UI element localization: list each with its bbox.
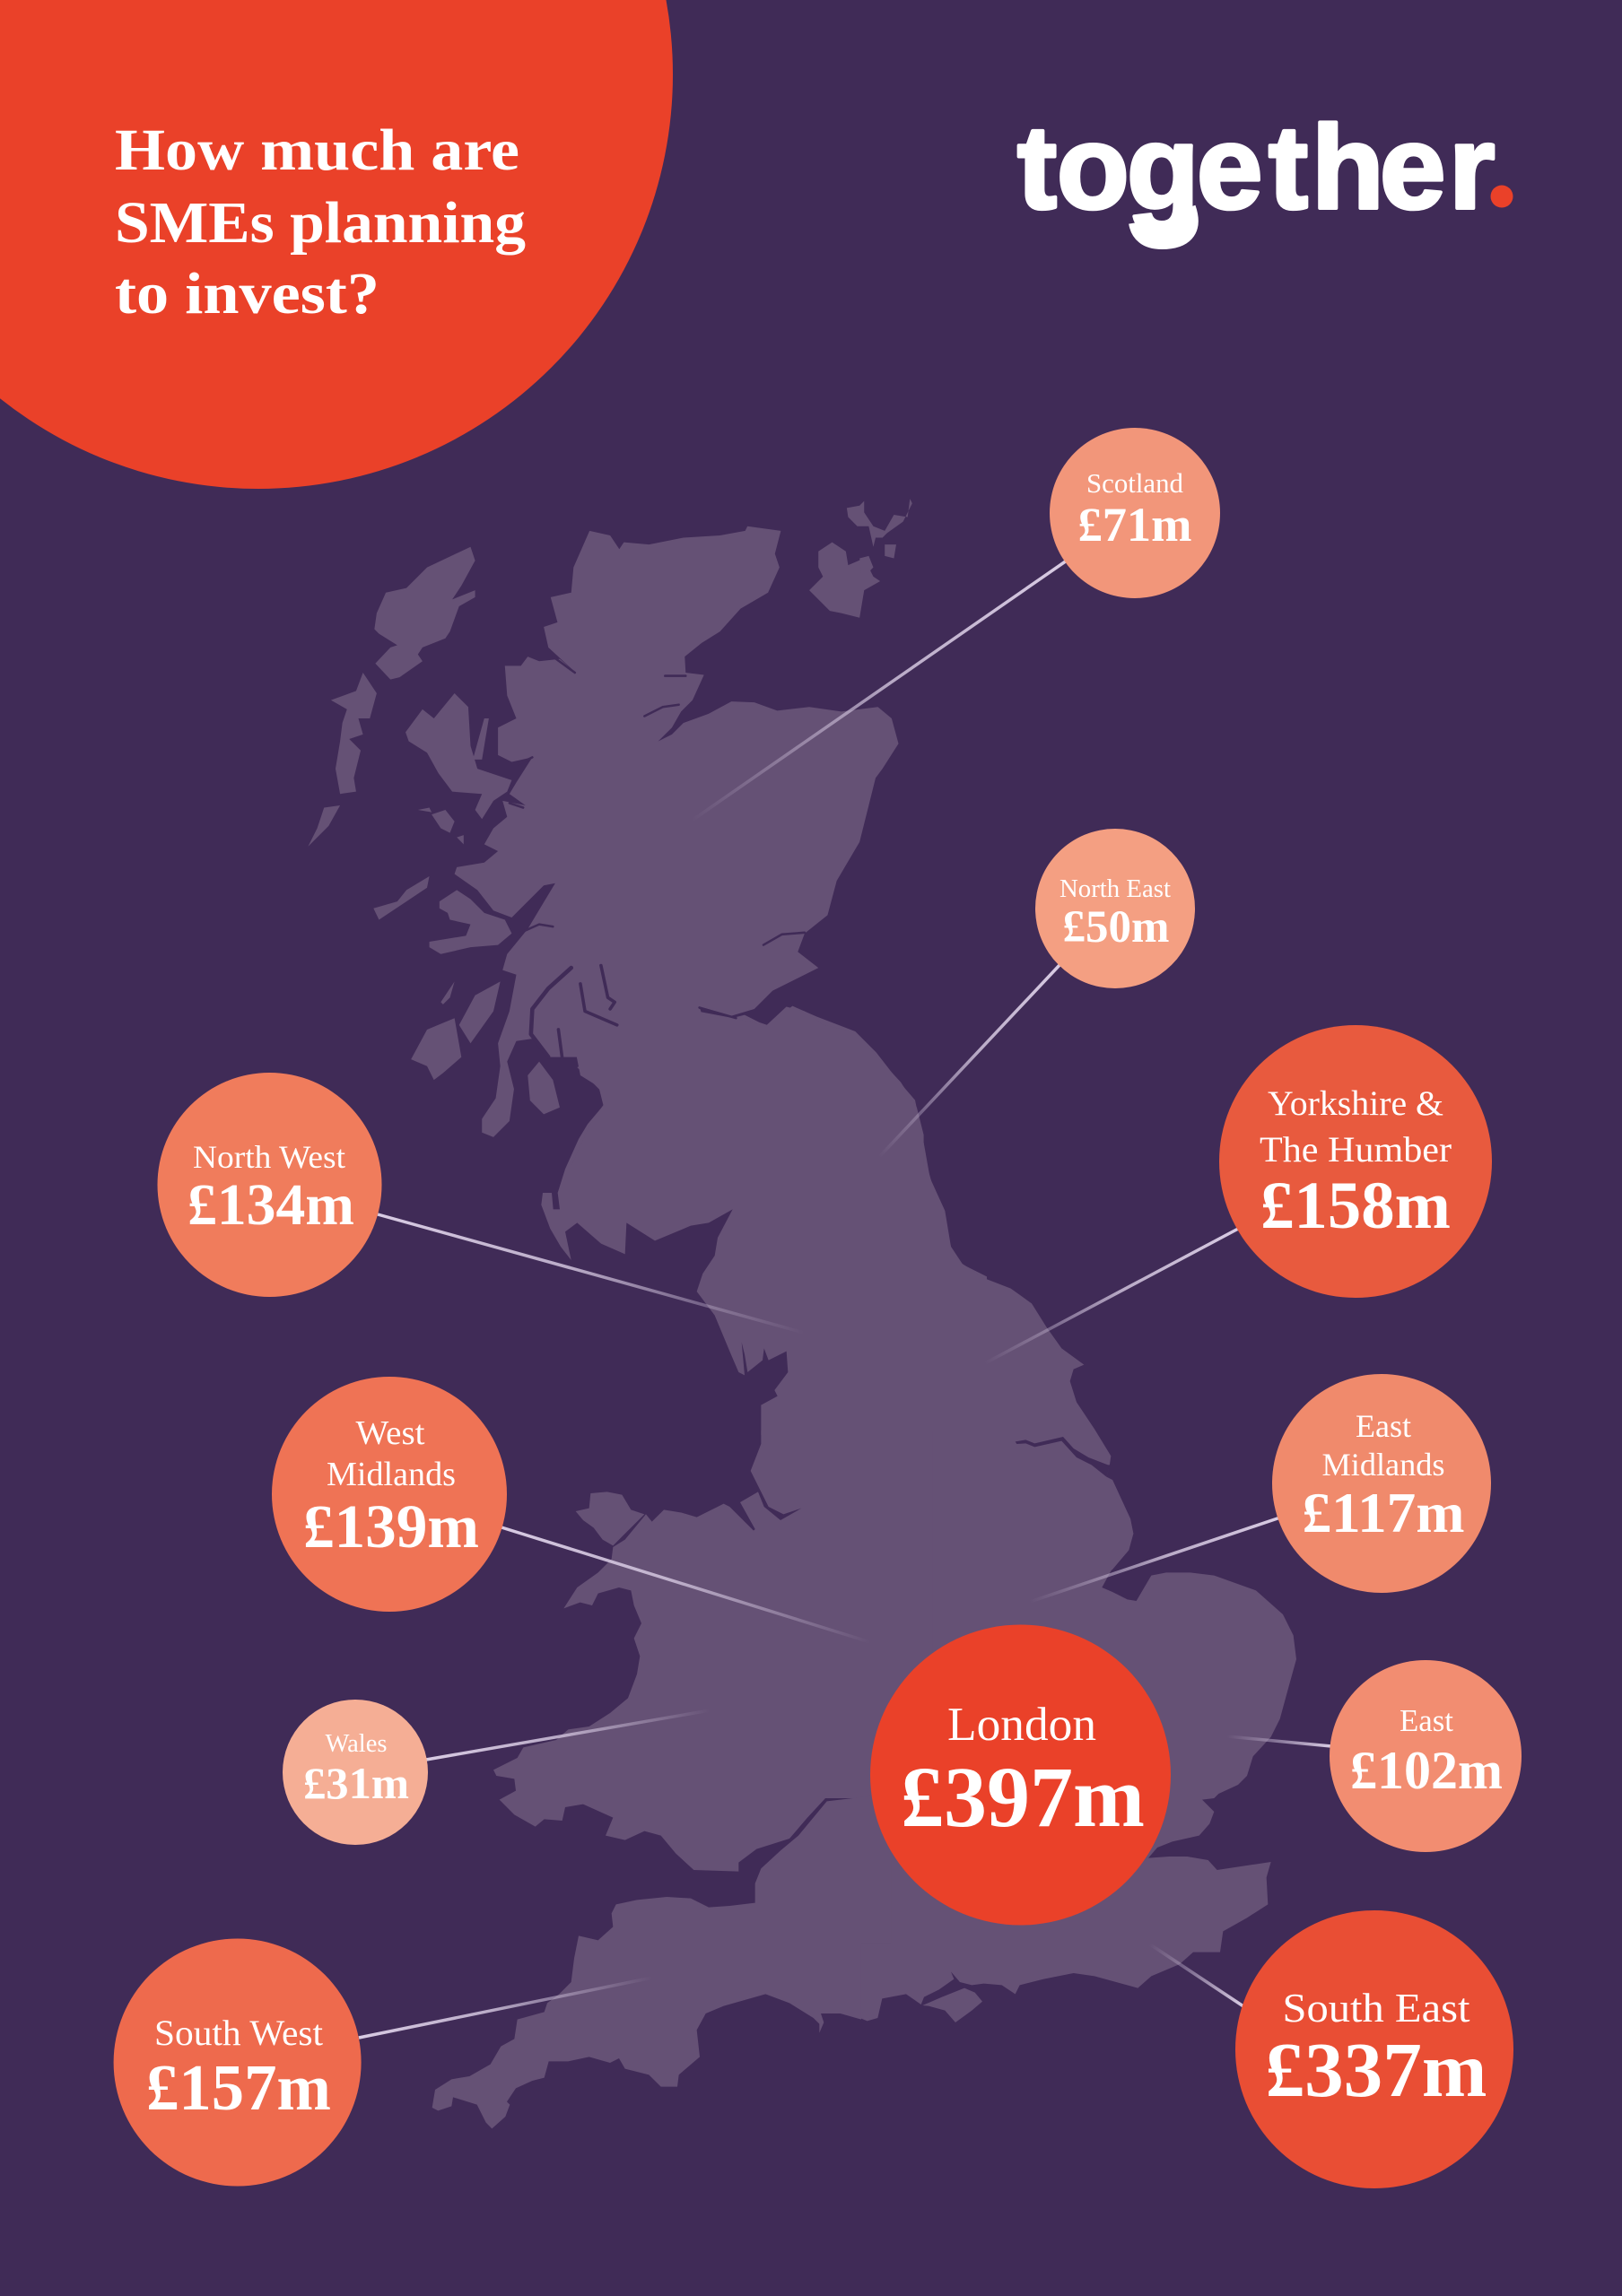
bubble: East Midlands: Midlands [1322,1447,1444,1483]
bubble: Scotland [1050,428,1220,598]
Rum and Eigg [418,808,464,844]
bubble: Wales: £31m [303,1758,409,1808]
bubble: Scotland: Scotland [1086,467,1183,499]
bubble: Yorkshire and The Humber: The Humber [1260,1129,1452,1170]
northern England [541,1006,987,1435]
Islay [411,1018,461,1080]
bubble: London: London [947,1699,1096,1751]
UK map [308,499,1296,2128]
bubble: North East: North East [1060,874,1171,903]
bubble: Yorkshire and The Humber [1219,1025,1492,1298]
Medway estuary [1164,1857,1187,1867]
bubble: South West: £157m [146,2051,331,2124]
bubble: South West: South West [154,2013,323,2053]
Jura [459,981,501,1043]
bubble: East Midlands: £117m [1303,1481,1464,1544]
Outer Hebrides: Lewis and Harris [374,547,475,680]
bubble: Wales [283,1700,428,1845]
bubble: East Midlands [1272,1374,1491,1593]
Outer Hebrides: Uists [331,673,377,794]
Isle of Wight [922,1988,982,2022]
Skye [406,693,511,819]
bubble: North East: £50m [1062,902,1170,952]
bubble: South West [114,1939,362,2187]
Arran [528,1062,560,1114]
bubble: South East [1235,1910,1513,2188]
bubble: South East: £337m [1265,2026,1487,2113]
bubble: West Midlands: West [355,1414,425,1452]
Coll and Tiree [373,876,430,920]
bubble: North West: £134m [187,1172,354,1238]
Humber estuary [1016,1437,1110,1477]
bubble: West Midlands: Midlands [327,1456,456,1493]
bubble: North East [1035,829,1195,988]
bubble: Wales: Wales [325,1730,388,1758]
bubble: East [1330,1660,1522,1852]
bubble: Yorkshire and The Humber: £158m [1260,1169,1451,1243]
east coast: Yorkshire and Lincolnshire [897,1121,1133,1570]
bubble: East: £102m [1350,1741,1503,1800]
bubble: Yorkshire and The Humber: Yorkshire & [1268,1084,1443,1123]
title [115,117,526,326]
bubble: South East: South East [1283,1985,1470,2031]
title: SMEs planning [115,190,526,256]
Colonsay [440,981,455,1004]
title: How much are [115,117,519,183]
bubble: East Midlands: East [1356,1408,1411,1444]
bubble: West Midlands: £139m [303,1492,479,1561]
Barra [308,805,340,847]
Raasay [473,718,489,760]
Mull [430,890,511,954]
title circle [0,0,673,489]
Wales and north-west coast [493,1431,933,1872]
sea lochs [510,657,805,1057]
bubble: London [870,1625,1171,1925]
Orkney [809,543,880,618]
south-west peninsula [432,1794,891,2128]
bubble: North West: North West [193,1139,345,1175]
bubble: Scotland: £71m [1078,498,1192,552]
logo: together: together [1017,101,1495,233]
Anglesey [576,1492,644,1545]
Shetland [847,499,912,578]
bubble: East: East [1400,1703,1453,1738]
Kent, Sussex and Hampshire [852,1839,1271,2022]
bubble: West Midlands [272,1377,507,1612]
Scotland [308,499,924,1166]
East Anglia and Essex [897,1480,1296,1899]
bubble: North West [158,1073,382,1297]
title: to invest? [115,261,379,326]
bubble: London: £397m [901,1749,1145,1845]
connector lines [359,561,1331,2038]
